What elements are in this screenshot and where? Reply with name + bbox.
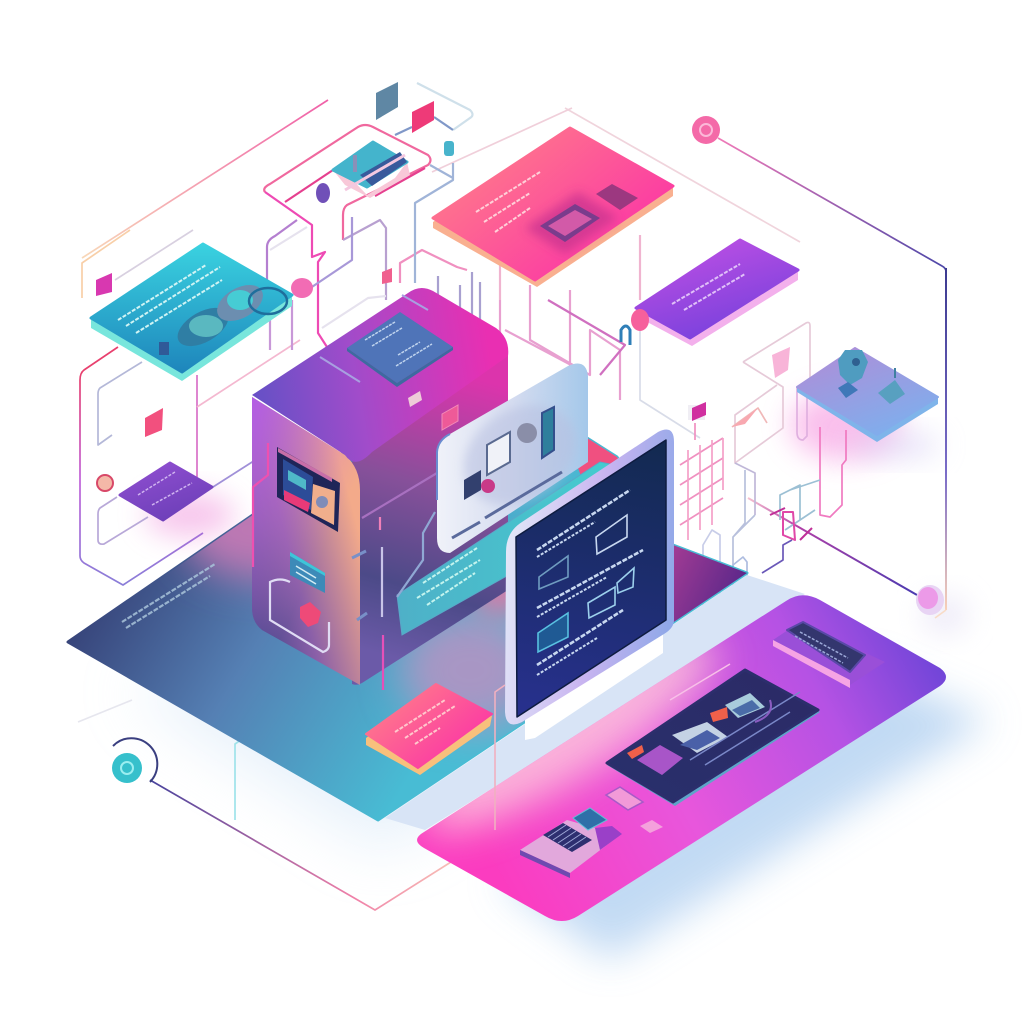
node icons [96,82,944,783]
screen text and icons [537,490,643,675]
small key 2 [640,820,663,833]
light lines on platform [670,664,730,700]
icon: pink petal [772,347,790,378]
panel: teal card in front of tower [397,462,640,635]
tower right face [352,350,508,685]
tag on top [408,391,422,407]
wedge: pink accent [732,408,758,427]
panel: purple card right [636,240,798,346]
panel: right pink-purple platform [404,595,946,921]
monitor frame [505,430,674,724]
panel: glass card [437,364,595,553]
panel: server tower [250,288,508,690]
icon: bottom right node [916,585,944,615]
tower left face [250,390,362,690]
icon: pink marker middle [631,309,649,331]
top ledge lines [320,295,428,382]
icon: teal chip [444,141,454,156]
soft shadows [130,390,990,960]
light band between base and platform [385,575,805,830]
panel: pink top card [433,128,673,287]
outer connector frame lines [78,100,946,910]
icon: circle left [97,475,113,491]
keyboard device [520,808,622,878]
base text lines [122,564,215,628]
pale platform glow [417,638,734,856]
icon: pink chip [412,101,434,133]
panel: small pink card [366,684,492,775]
panel: teal card [91,244,292,381]
circuit lines: top cluster [264,83,640,400]
icon: pink tag left [96,273,112,296]
panel: isometric device on top [316,142,410,203]
icon: top right node [692,116,720,144]
panel: right isometric desk [797,348,938,442]
icon: pink tag center left [145,408,163,437]
circuit lines: right cluster [640,322,846,675]
top screen [347,312,453,387]
panel: base platform [68,400,760,820]
icon: bottom left node [112,738,157,783]
icon: hook blue [621,326,630,345]
pink tag on right face [442,405,458,430]
monitor screen [516,440,666,717]
pink wire on tower left [253,443,268,567]
icon: small red tag [688,402,706,421]
panel: small purple card left [120,463,212,520]
side monitor [277,447,340,532]
side label [290,552,325,593]
icon: small pink node [382,268,392,284]
tower wires [352,473,437,690]
side circuit line [270,580,329,652]
monitor stand [525,620,663,740]
small key 1 [606,787,643,810]
tower top face [252,288,508,462]
dark tablet [607,670,820,806]
icon: pink marker tower [291,278,313,298]
top right device [773,622,885,688]
icon: grey chip [376,82,398,120]
riser line to platform [495,685,505,830]
red hexagon icon [300,602,321,627]
panel: main monitor [505,430,674,740]
